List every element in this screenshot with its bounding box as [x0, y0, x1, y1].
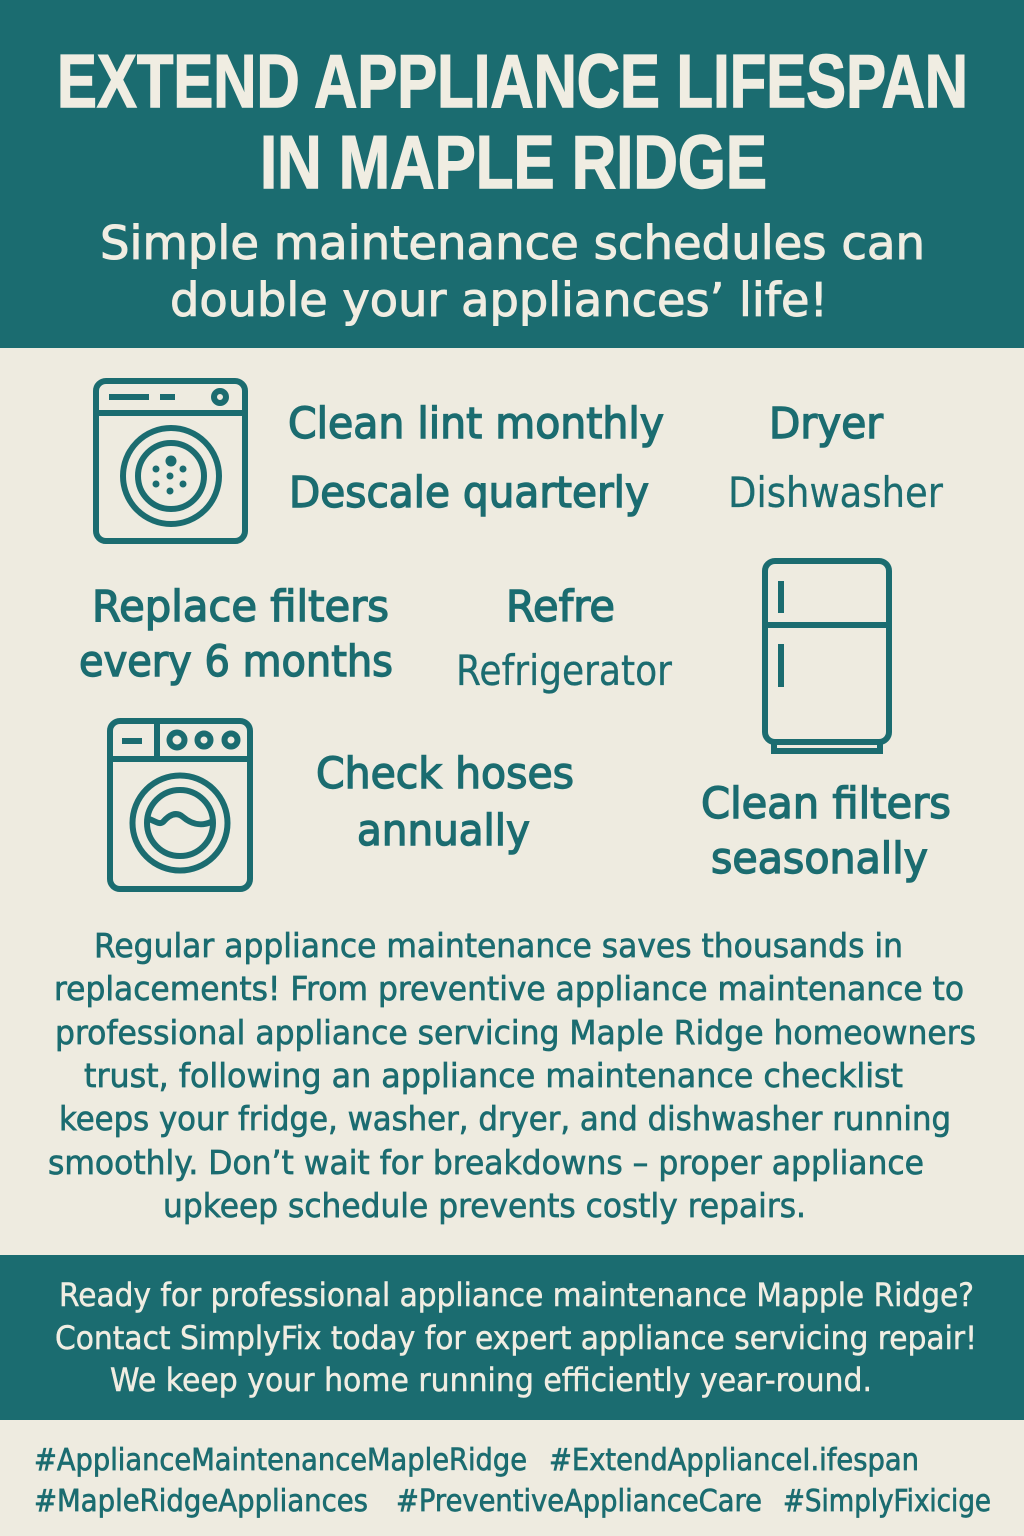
text block: body paragraph: upkeep schedule prevents costly repairs.	[163, 1186, 806, 1225]
icon: washer	[110, 721, 250, 889]
task: check hoses: Check hoses	[316, 749, 574, 799]
panel: maintenance schedule	[79, 381, 951, 889]
panel: call to action: We keep your home running efficiently year-round.	[110, 1361, 872, 1399]
panel: call to action	[0, 1255, 1024, 1420]
task: check hoses: annually	[357, 806, 530, 856]
hashtags: #ExtendApplianceI.ifespan	[549, 1443, 919, 1478]
panel: call to action: Contact SimplyFix today for expert appliance servicing repair!	[55, 1319, 977, 1357]
hashtags: #PreventiveApplianceCare	[396, 1484, 762, 1519]
label: refre: Refre	[506, 582, 615, 632]
task: descale quarterly: Descale quarterly	[289, 468, 649, 518]
text block: body paragraph: Regular appliance maintenance saves thousands in	[94, 926, 903, 965]
icon: dryer	[96, 381, 245, 541]
task: replace filters: Replace filters	[92, 582, 389, 632]
task: clean filters: seasonally	[711, 834, 928, 884]
text block: body paragraph: professional appliance servicing Maple Ridge homeowners	[55, 1013, 976, 1052]
hashtags: #SimplyFixicige	[783, 1484, 991, 1519]
task: check hoses	[316, 749, 574, 856]
subtitle: Simple maintenance schedules can	[100, 216, 925, 270]
text block: body paragraph: keeps your fridge, washer, dryer, and dishwasher running	[59, 1099, 951, 1138]
label: refrigerator: Refrigerator	[456, 646, 673, 695]
text block: body paragraph: replacements! From preventive appliance maintenance to	[54, 969, 964, 1008]
hashtags	[34, 1443, 991, 1519]
task: replace filters: every 6 months	[79, 637, 393, 687]
subtitle: double your appliances’ life!	[170, 273, 828, 327]
label: dryer: Dryer	[769, 399, 883, 449]
task: clean lint monthly: Clean lint monthly	[288, 399, 664, 449]
task: clean filters: Clean filters	[701, 779, 951, 829]
task: replace filters	[79, 582, 393, 687]
text block: body paragraph: trust, following an appliance maintenance checklist	[84, 1056, 903, 1095]
task: clean filters	[701, 779, 951, 884]
label: dishwasher: Dishwasher	[728, 468, 944, 517]
title	[57, 39, 968, 204]
icon: refrigerator	[765, 561, 889, 751]
text block: body paragraph	[48, 926, 976, 1225]
panel: header	[0, 0, 1024, 348]
text block: body paragraph: smoothly. Don’t wait for breakdowns – proper appliance	[48, 1143, 924, 1182]
subtitle	[100, 216, 925, 327]
title: IN MAPLE RIDGE	[260, 120, 767, 204]
hashtags: #MapleRidgeAppliances	[34, 1484, 368, 1519]
hashtags: #ApplianceMaintenanceMapleRidge	[34, 1443, 527, 1478]
panel: call to action: Ready for professional appliance maintenance Mapple Ridge?	[59, 1276, 974, 1314]
